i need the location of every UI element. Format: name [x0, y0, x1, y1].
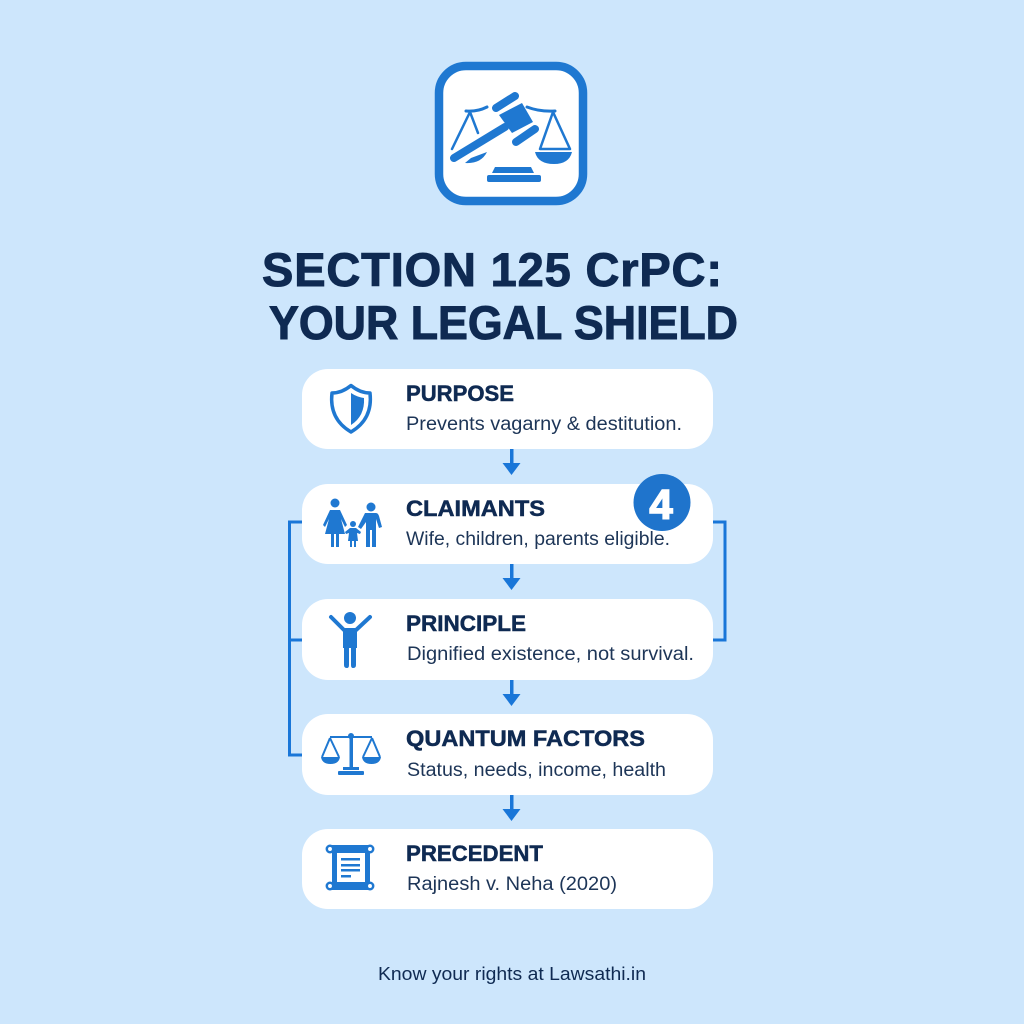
- claimants text: Wife, children, parents eligible.: [406, 529, 670, 550]
- panel: quantum factors: [302, 714, 713, 795]
- quantum factors heading: QUANTUM FACTORS: [406, 726, 645, 751]
- panel: precedent: [302, 829, 713, 909]
- principle heading: PRINCIPLE: [406, 611, 526, 636]
- arrow: principle to quantum factors: [502, 680, 520, 706]
- panel: claimants: [302, 474, 713, 564]
- claimants heading: CLAIMANTS: [406, 496, 545, 521]
- precedent heading: PRECEDENT: [406, 841, 544, 866]
- icon: shield: [332, 386, 370, 432]
- quantum factors text: Status, needs, income, health: [407, 760, 666, 781]
- icon: scroll document: [327, 845, 373, 890]
- arrow: purpose to claimants: [502, 449, 520, 475]
- icon: gavel and scales logo: [439, 66, 583, 201]
- icon: family: [323, 498, 382, 547]
- arrow: claimants to principle: [502, 564, 520, 590]
- precedent text: Rajnesh v. Neha (2020): [407, 874, 617, 895]
- badge: number 4: 4: [649, 481, 673, 528]
- icon: person with raised arms: [331, 612, 370, 668]
- purpose heading: PURPOSE: [406, 381, 514, 406]
- right connector bracket: [713, 522, 725, 640]
- title: [262, 243, 738, 349]
- panel: principle: [302, 599, 713, 680]
- left connector bracket: [290, 522, 302, 755]
- principle text: Dignified existence, not survival.: [407, 644, 694, 665]
- panel: purpose: [302, 369, 713, 449]
- badge: number 4: [634, 474, 690, 531]
- arrow: quantum factors to precedent: [502, 795, 520, 821]
- icon: balance scales: [321, 733, 381, 775]
- title: SECTION 125 CrPC:: [262, 243, 722, 296]
- title: YOUR LEGAL SHIELD: [269, 296, 738, 349]
- footer: Know your rights at Lawsathi.in: [378, 963, 646, 984]
- purpose text: Prevents vagarny & destitution.: [406, 414, 682, 435]
